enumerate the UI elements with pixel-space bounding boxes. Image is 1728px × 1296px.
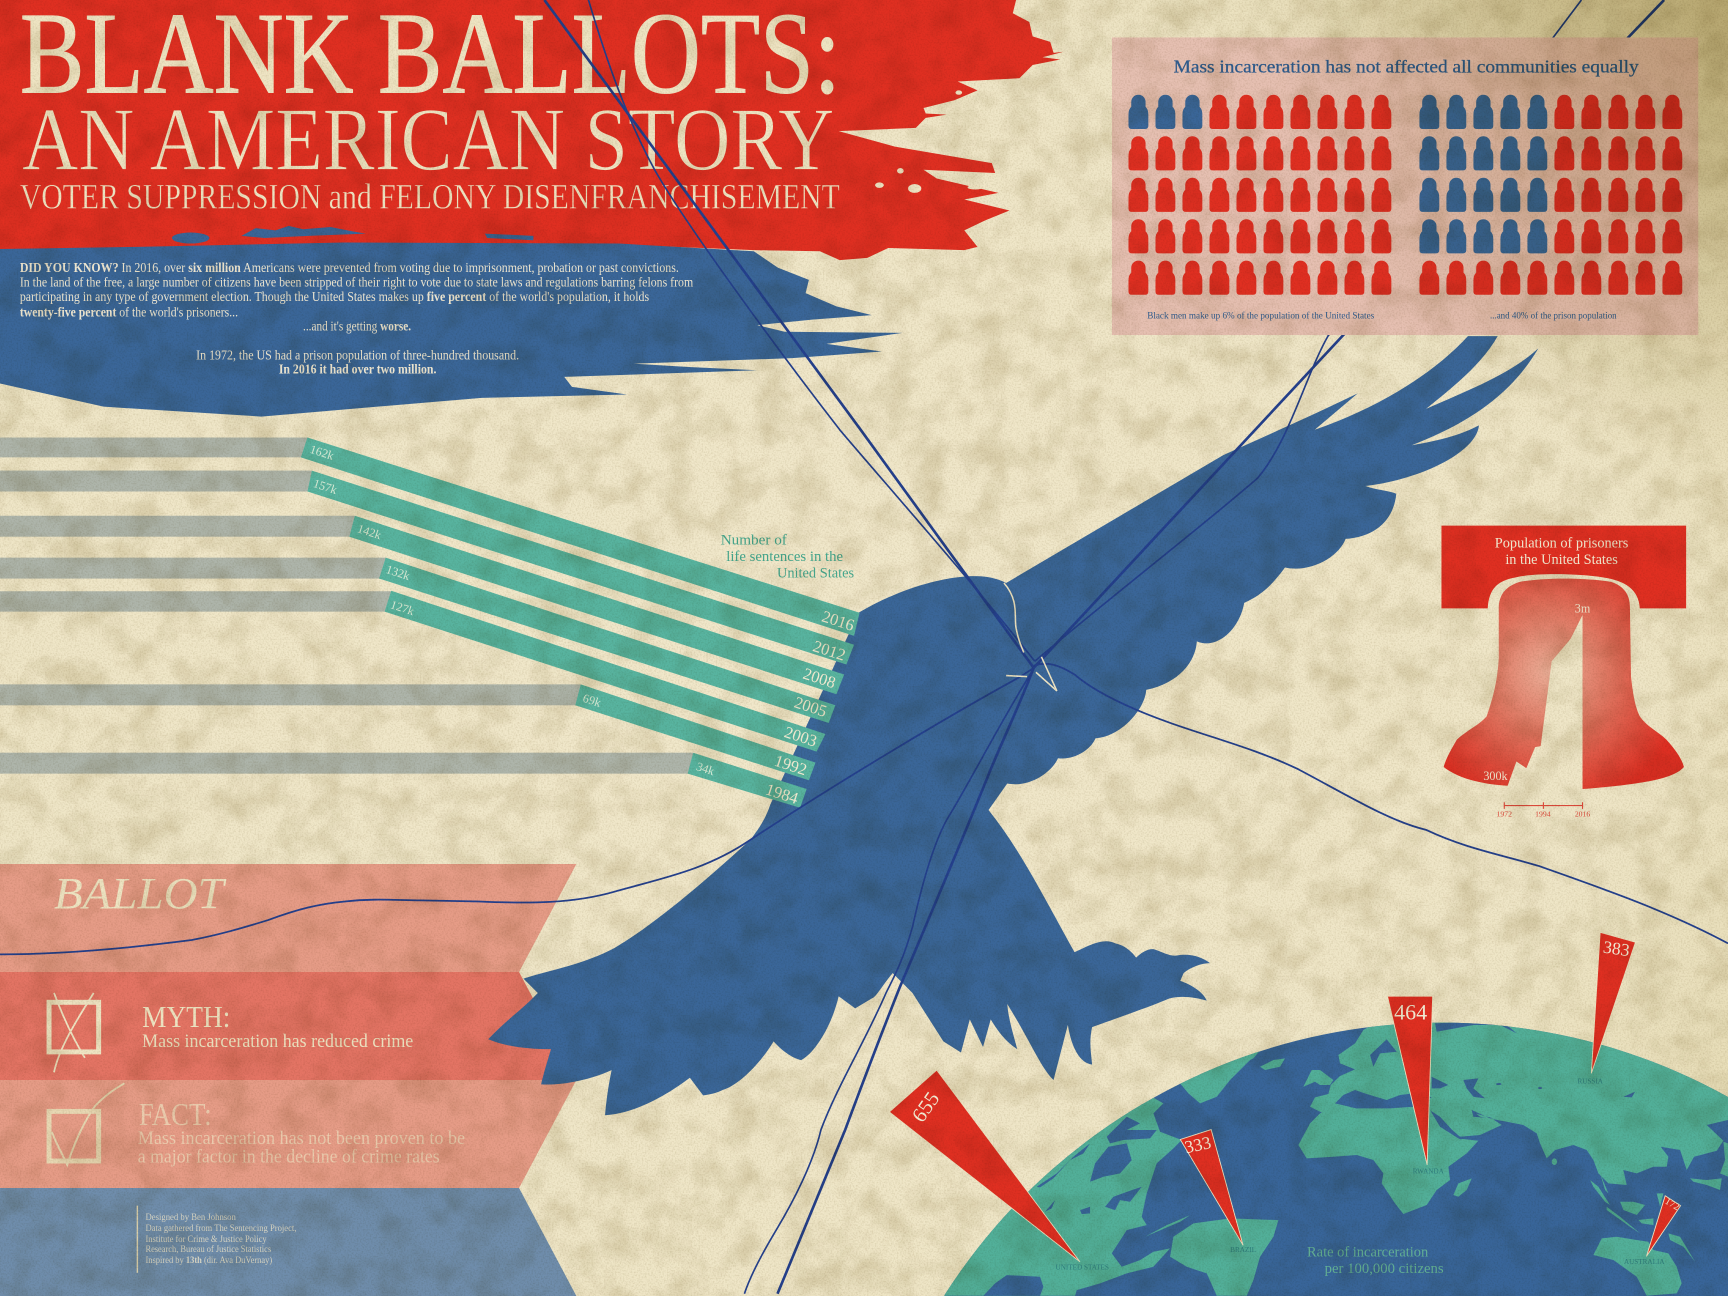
- year labels: 1984: [763, 780, 801, 808]
- bell yoke: [1441, 526, 1686, 608]
- rate of incarceration caption: [1307, 1244, 1444, 1277]
- chart caption: life sentences in the: [726, 549, 843, 565]
- ocean: [944, 1020, 1728, 1296]
- myth text: [142, 1000, 413, 1052]
- bell values: 3m: [1575, 602, 1591, 616]
- left stacked bands: [0, 864, 576, 1296]
- intro text block: In 2016 it had over two million.: [279, 362, 436, 377]
- value labels: 34k: [695, 759, 717, 778]
- bell title: in the United States: [1505, 552, 1618, 568]
- icon: ticked checkbox: [49, 1083, 125, 1165]
- pin values: [907, 937, 1681, 1213]
- pin values: 383: [1602, 937, 1631, 960]
- country labels: [1056, 1077, 1665, 1272]
- fact text: Mass incarceration has not been proven to be: [138, 1128, 465, 1149]
- bell values: [1483, 602, 1591, 783]
- band: credits: [0, 1188, 576, 1296]
- year labels: 2003: [782, 722, 819, 751]
- credits: Designed by Ben Johnson: [145, 1212, 236, 1223]
- blue brush stroke: [0, 242, 903, 417]
- bell values: 300k: [1483, 769, 1509, 783]
- pin: Rwanda: [1387, 996, 1433, 1165]
- country labels: BRAZIL: [1230, 1246, 1256, 1254]
- credits: Inspired by 13th (dir. Ava DuVernay): [145, 1255, 272, 1266]
- fact text: FACT:: [139, 1097, 212, 1132]
- intro text block: In the land of the free, a large number of citizens have been stripped of their right to vote due to state laws and regulations barring felons from: [20, 275, 694, 290]
- chart caption: United States: [777, 565, 854, 581]
- title: [20, 0, 841, 216]
- intro text block: participating in any type of government election. Though the United States makes up five percent of the world's population, it holds: [20, 289, 649, 304]
- pin values: 172: [1663, 1196, 1681, 1213]
- panel captions: ...and 40% of the prison population: [1490, 310, 1617, 321]
- pin: Brazil: [1180, 1130, 1243, 1245]
- globe: [936, 1012, 1728, 1296]
- country labels: RUSSIA: [1578, 1077, 1604, 1085]
- panel captions: Black men make up 6% of the population of the United States: [1147, 310, 1374, 321]
- credits: [137, 1206, 296, 1273]
- icon: crossed checkbox: [49, 993, 99, 1072]
- credits: Research, Bureau of Justice Statistics: [145, 1244, 271, 1255]
- pin values: 333: [1183, 1132, 1213, 1157]
- timeline labels: 1972: [1497, 810, 1512, 819]
- value labels: 127k: [389, 597, 417, 619]
- pin: Australia: [1646, 1196, 1681, 1256]
- red brush stroke: [0, 0, 1063, 260]
- pin values: 464: [1394, 999, 1427, 1024]
- myth text: Mass incarceration has reduced crime: [142, 1031, 413, 1052]
- rate of incarceration caption: per 100,000 citizens: [1325, 1261, 1444, 1277]
- credits: Data gathered from The Sentencing Project,: [145, 1223, 296, 1234]
- band: myth: [0, 972, 576, 1080]
- year labels: 2008: [801, 664, 838, 692]
- fact text: a major factor in the decline of crime rates: [138, 1147, 440, 1168]
- Eurasia, Africa and Oceania: [1237, 1012, 1728, 1296]
- panel background: [1112, 37, 1698, 335]
- pins: [889, 932, 1681, 1262]
- Americas: [936, 1047, 1278, 1296]
- intro text block: ...and it's getting worse.: [303, 319, 411, 334]
- paper flecks on red: [875, 90, 983, 193]
- fact text: [138, 1097, 465, 1168]
- value labels: 69k: [581, 691, 604, 710]
- rate of incarceration caption: Rate of incarceration: [1307, 1244, 1429, 1260]
- value labels: 142k: [356, 521, 384, 542]
- pin values: 655: [907, 1087, 944, 1127]
- grey bars: [0, 438, 693, 774]
- band: fact: [0, 1080, 576, 1188]
- year labels: 2016: [820, 607, 857, 635]
- year labels: 2012: [811, 636, 848, 665]
- bell title: [1495, 536, 1629, 568]
- chart caption: [721, 532, 854, 581]
- value labels: 132k: [384, 562, 413, 583]
- band: ballot: [0, 864, 576, 972]
- panel: communities: [1112, 37, 1698, 335]
- year labels: [763, 607, 857, 808]
- country labels: UNITED STATES: [1056, 1264, 1109, 1272]
- year labels: 1992: [772, 751, 809, 779]
- bell timeline: [1504, 802, 1583, 809]
- blue paint flecks on red: [172, 226, 533, 244]
- eagle silhouette: [488, 336, 1538, 1115]
- chart: number of life sentences: [0, 438, 860, 808]
- intro text block: [20, 260, 694, 377]
- bell title: Population of prisoners: [1495, 536, 1629, 552]
- intro text block: DID YOU KNOW? In 2016, over six million Americans were prevented from voting due to imprisonment, probation or past convictions.: [20, 260, 679, 275]
- icon grid: prison: [1419, 95, 1682, 295]
- value labels: 157k: [312, 476, 340, 497]
- bell body chart: [1444, 579, 1684, 789]
- timeline labels: 1994: [1535, 810, 1551, 819]
- teal slanted bars: [301, 438, 860, 808]
- chart caption: Number of: [721, 532, 787, 548]
- ballot heading: BALLOT: [54, 869, 227, 918]
- timeline labels: [1497, 810, 1590, 819]
- year labels: 2005: [792, 693, 829, 721]
- intro text block: In 1972, the US had a prison population of three-hundred thousand.: [196, 347, 519, 362]
- value labels: [308, 442, 717, 778]
- timeline labels: 2016: [1575, 810, 1590, 819]
- icon grid: population: [1128, 95, 1391, 295]
- value labels: 162k: [308, 442, 337, 463]
- country labels: AUSTRALIA: [1624, 1258, 1665, 1266]
- bell: prison population: [1441, 526, 1686, 809]
- credits: Institute for Crime & Justice Policy: [145, 1234, 267, 1245]
- title: AN AMERICAN STORY: [22, 89, 834, 190]
- intro text block: twenty-five percent of the world's prisoners...: [20, 304, 238, 319]
- pin: United States: [889, 1070, 1080, 1262]
- pin: Russia: [1591, 932, 1635, 1073]
- panel captions: [1147, 310, 1617, 321]
- country labels: RWANDA: [1413, 1168, 1445, 1176]
- title: VOTER SUPPRESSION and FELONY DISENFRANCHISEMENT: [20, 176, 840, 216]
- panel heading: Mass incarceration has not affected all communities equally: [1174, 57, 1639, 77]
- cream highlights on eagle: [1004, 583, 1057, 691]
- myth text: MYTH:: [142, 1000, 230, 1034]
